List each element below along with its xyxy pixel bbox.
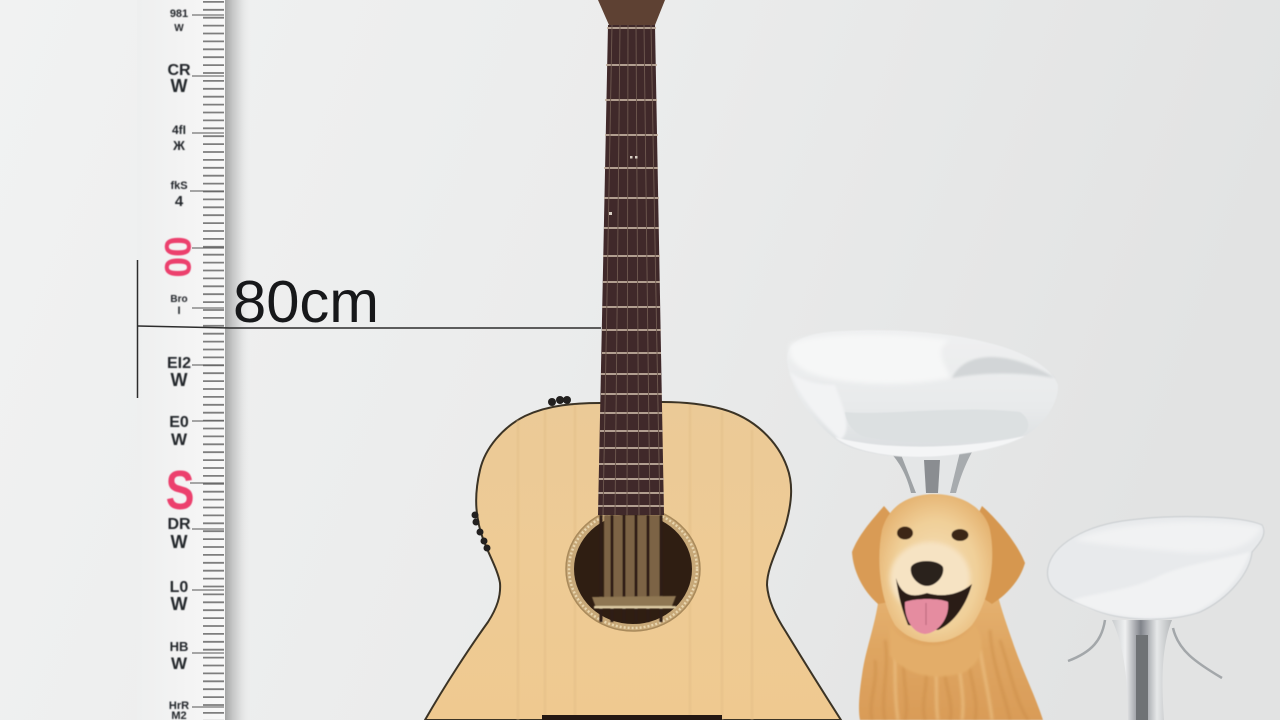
eyes <box>897 526 913 540</box>
ruler number labels <box>167 8 191 720</box>
mouth <box>896 578 972 630</box>
seat body <box>787 330 1058 457</box>
muzzle <box>890 542 970 614</box>
guitar headstock <box>598 0 665 25</box>
ruler number labels: W <box>170 594 188 614</box>
ruler number labels: E0 <box>169 414 189 431</box>
wood grain <box>518 405 752 720</box>
seat fold shadow <box>952 357 1055 378</box>
ruler number labels: W <box>174 23 184 34</box>
ruler number labels: W <box>170 532 188 552</box>
footrest left <box>1068 620 1105 661</box>
seat lower rim <box>835 436 1025 457</box>
ruler red marker 1: 00 <box>157 236 198 278</box>
neck ruff <box>890 625 982 677</box>
ruler minor tick marks <box>203 0 224 720</box>
ruler number labels: W <box>170 370 188 390</box>
stool stem <box>890 452 972 493</box>
seat <box>1048 517 1264 619</box>
ruler number labels: CR <box>167 62 191 79</box>
seat back rim <box>1075 522 1262 553</box>
guitar <box>425 0 841 720</box>
ruler number labels: W <box>171 654 188 673</box>
soundhole rosette <box>566 507 700 631</box>
fret markers <box>609 156 638 215</box>
height ruler <box>137 0 251 720</box>
bridge <box>542 715 722 720</box>
ruler major tick marks <box>190 15 224 707</box>
pickup controls <box>472 396 571 552</box>
ruler number labels: I <box>177 305 181 317</box>
ruler number labels: L0 <box>170 579 188 596</box>
ruler number labels: W <box>171 430 188 449</box>
ruler red marker 2: S <box>166 460 194 521</box>
measure line horizontal <box>138 326 601 328</box>
ruler number labels: Bro <box>170 294 188 305</box>
ruler number labels: 4fI <box>172 123 186 137</box>
left ear <box>852 506 900 604</box>
ruler number labels: Ж <box>172 138 185 153</box>
ruler number labels: HrR <box>169 700 189 712</box>
right ear <box>970 506 1025 604</box>
stool back: white seat <box>787 330 1058 493</box>
ruler number labels: HB <box>170 639 188 654</box>
height label: 80cm <box>233 269 379 335</box>
measure line vertical <box>136 260 138 398</box>
stool front: clear seat <box>1048 517 1264 720</box>
stem <box>1112 620 1172 720</box>
chest fur <box>871 630 1028 720</box>
footrest right <box>1173 628 1222 678</box>
seat highlight <box>790 335 950 384</box>
inner strings and brace <box>592 515 676 622</box>
golden retriever <box>852 494 1043 720</box>
tongue <box>905 599 948 634</box>
guitar body <box>425 402 841 720</box>
ruler number labels: 4 <box>175 193 184 210</box>
seat cushion <box>1072 552 1250 618</box>
nose <box>911 561 943 586</box>
fretboard <box>598 25 664 515</box>
ruler number labels: fkS <box>170 180 188 192</box>
seat inner pan <box>845 410 1028 443</box>
body <box>859 585 1043 720</box>
ruler number labels: EI2 <box>167 355 191 372</box>
ruler number labels: DR <box>167 516 191 533</box>
seat left roll <box>790 372 846 440</box>
ruler number labels: 981 <box>170 8 188 20</box>
soundhole <box>574 514 692 624</box>
frets <box>598 28 664 506</box>
strings <box>603 25 660 515</box>
head <box>879 494 992 642</box>
ruler number labels: W <box>170 76 188 96</box>
